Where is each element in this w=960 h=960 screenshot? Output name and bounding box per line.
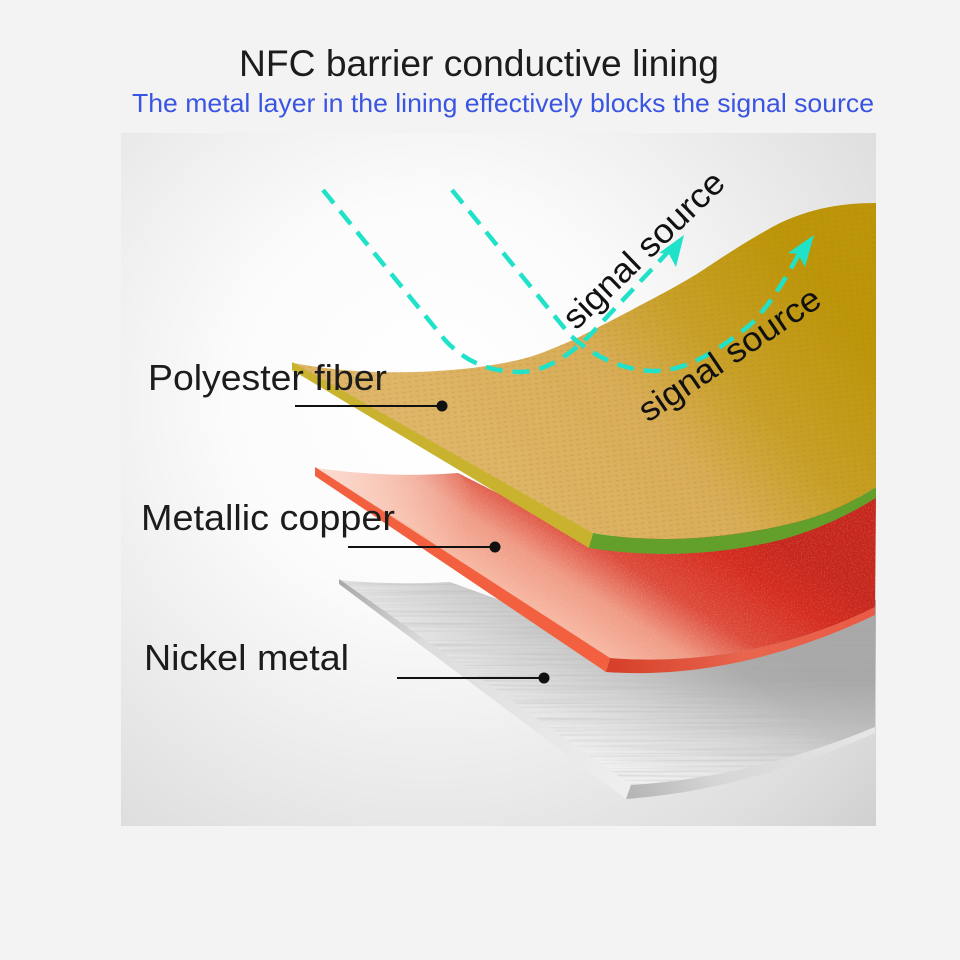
background panel (121, 133, 876, 826)
arrowhead left (659, 235, 684, 267)
callout: polyester fiber: Polyester fiber (148, 357, 387, 398)
signal path right (452, 190, 800, 371)
rotated label: signal source lower: signal source (631, 280, 828, 430)
layer: metallic copper (315, 465, 876, 673)
callout: polyester fiber (148, 357, 448, 412)
callout: nickel metal (144, 637, 550, 684)
arrowhead right (788, 235, 814, 267)
callout: metallic copper (141, 497, 500, 552)
callout: metallic copper: Metallic copper (141, 497, 395, 538)
subtitle: The metal layer in the lining effectively blocks the signal source (132, 88, 874, 118)
infographic canvas (121, 49, 876, 826)
title: NFC barrier conductive lining (239, 43, 719, 84)
layer: polyester fiber (292, 203, 876, 554)
layer: nickel metal (339, 575, 876, 800)
rotated label: signal source upper: signal source (555, 164, 733, 337)
callout: nickel metal: Nickel metal (144, 637, 349, 678)
signal path left (323, 190, 668, 372)
